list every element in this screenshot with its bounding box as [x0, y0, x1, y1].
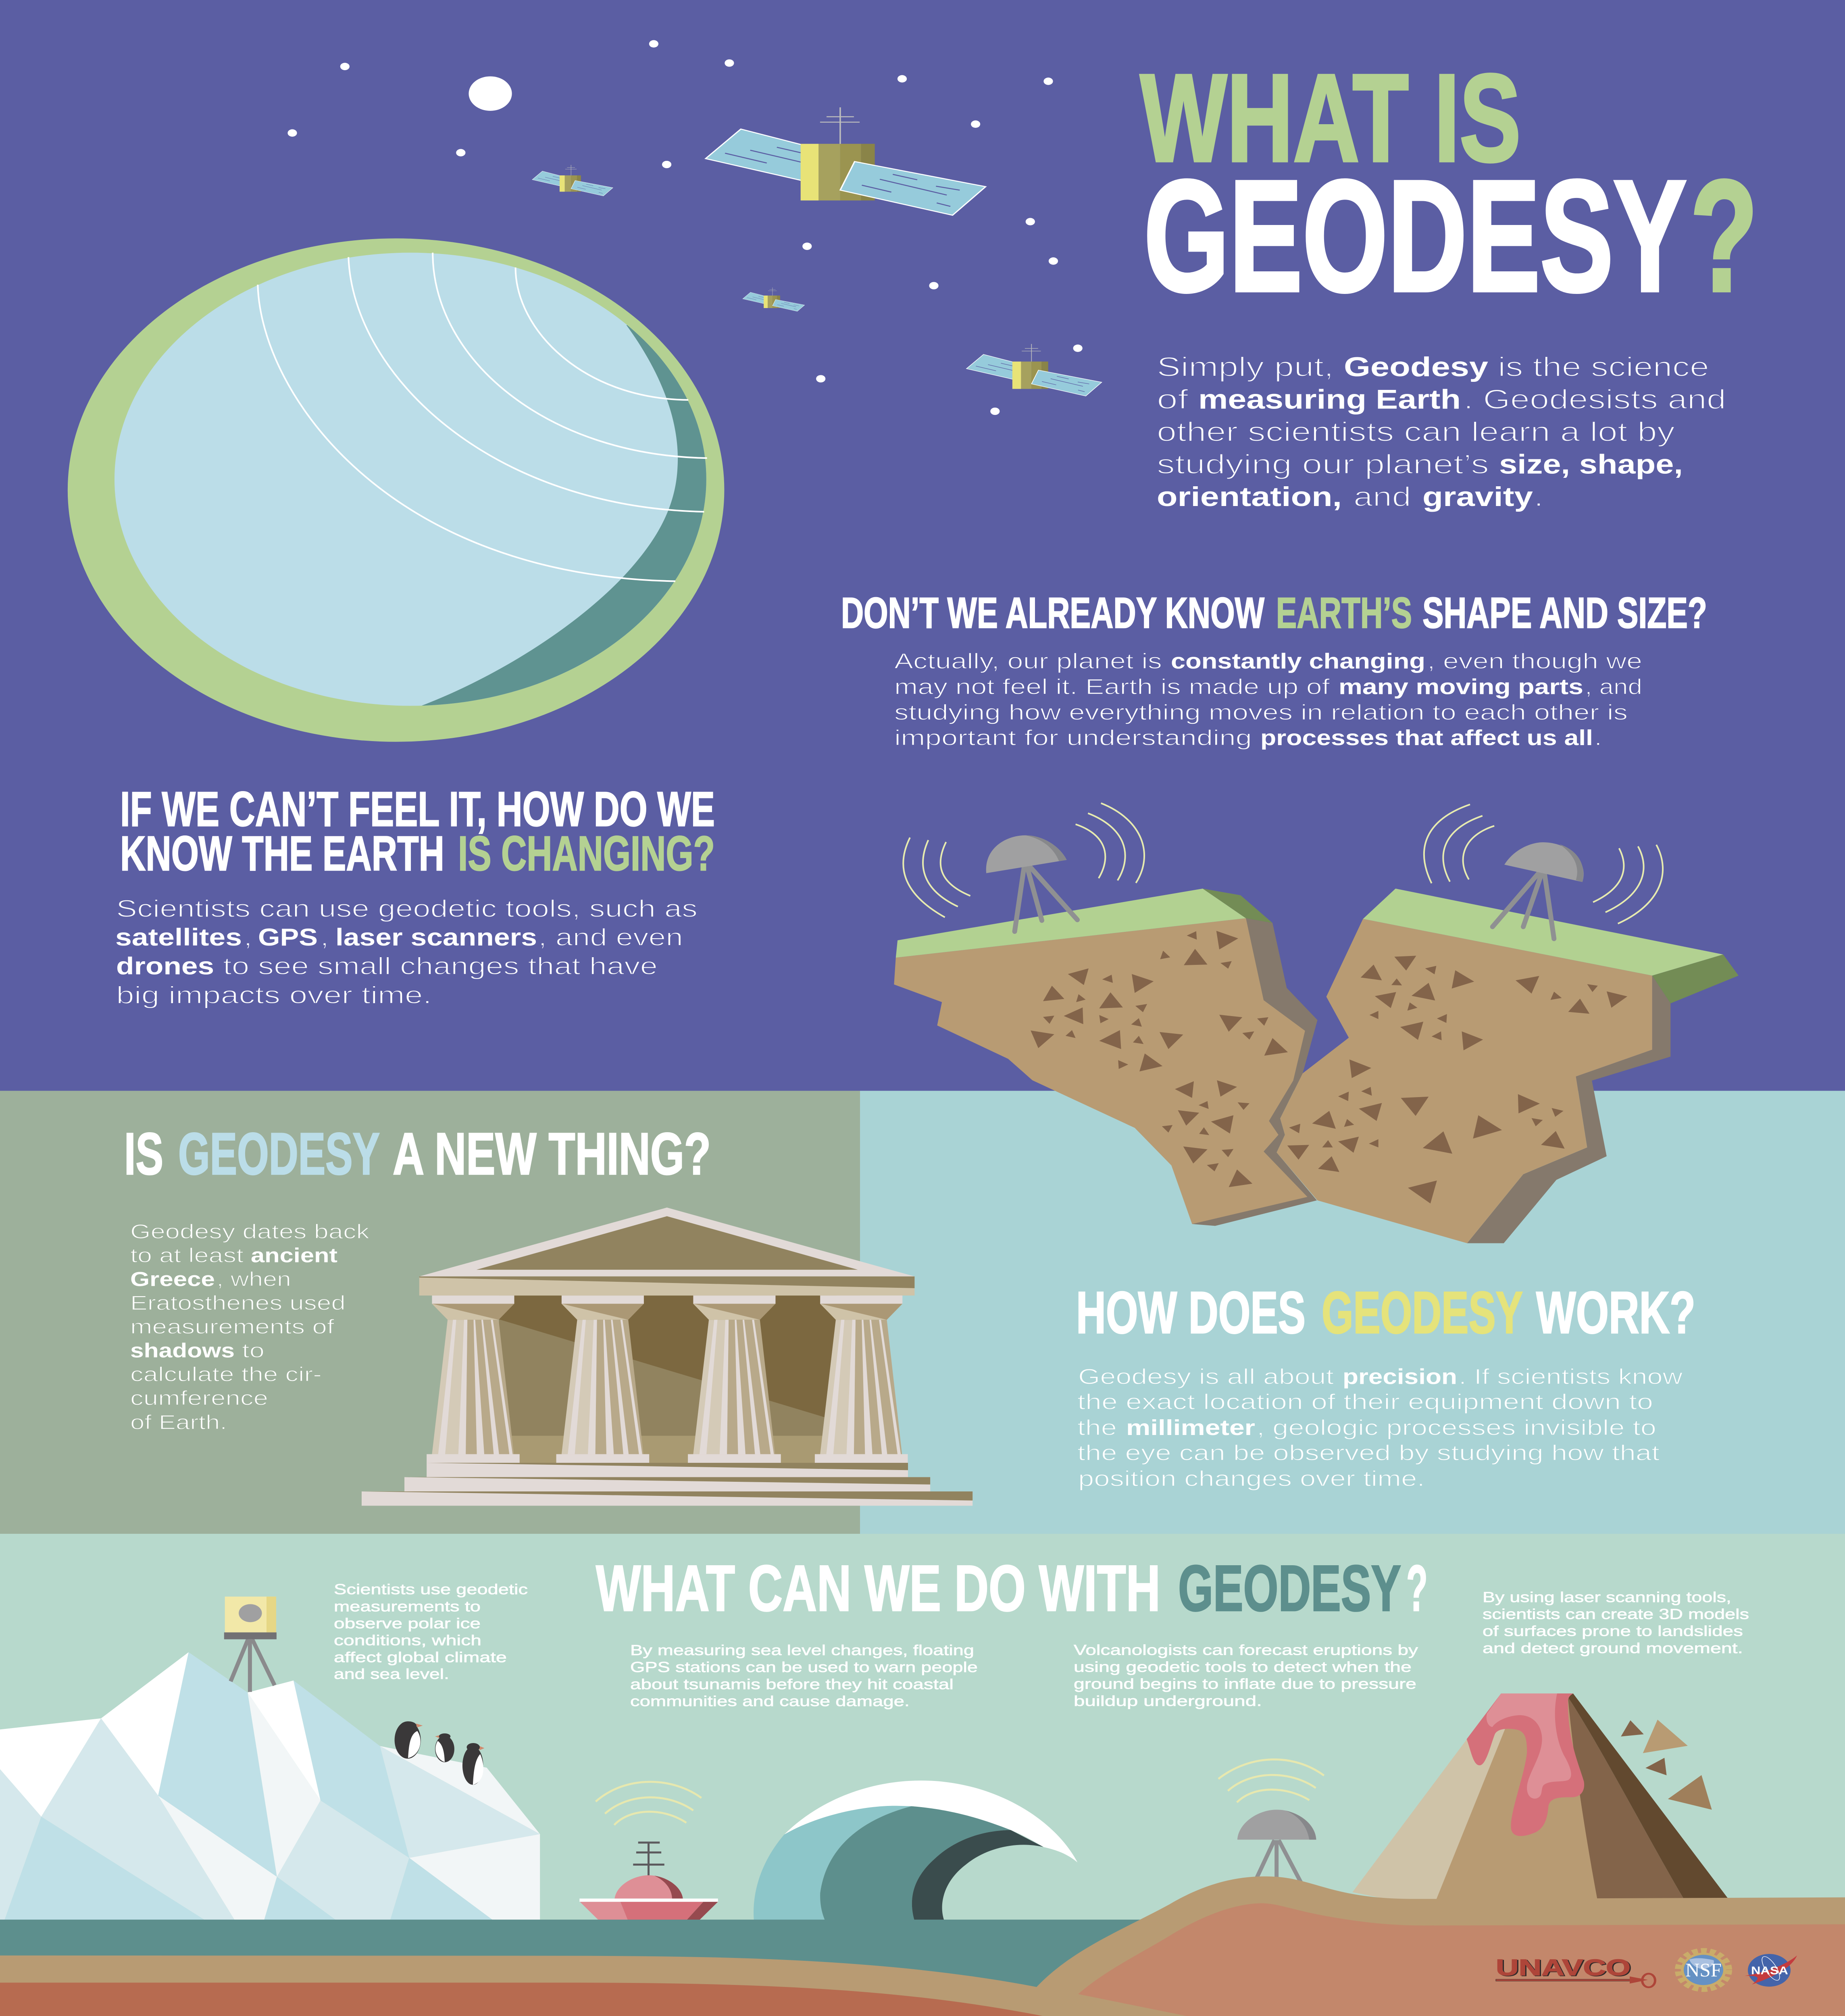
- temple column 4: [815, 1295, 908, 1463]
- text: ?: [1406, 1552, 1428, 1624]
- text block: shape and size: constantly changing: [1171, 650, 1425, 673]
- text block: precision: [1077, 1365, 1683, 1491]
- temple column 2: [556, 1295, 649, 1463]
- text block: geodetic tools: drones: [116, 952, 214, 979]
- flying rocks: [1621, 1720, 1712, 1810]
- text block: polar ice: conditions, which: [334, 1632, 481, 1648]
- text block: precision: millimeter: [1126, 1416, 1255, 1440]
- text block: history: , when: [217, 1268, 291, 1291]
- logo: NSF: [1678, 1951, 1728, 1989]
- text block: tsunami: GPS stations can be used to warn people: [630, 1659, 978, 1675]
- penguin 2: [435, 1733, 454, 1762]
- illustration: earth globe: [68, 238, 724, 742]
- heading: how does geodesy work: HOW DOES: [1076, 1280, 1306, 1346]
- heading: is geodesy new: [124, 1121, 711, 1187]
- temple column 1: [427, 1295, 520, 1463]
- logo: UNAVCO: UNAVCO: [1496, 1954, 1631, 1980]
- logo: UNAVCO: UNAVCO: [1497, 1955, 1632, 1981]
- text block: precision: Geodesy is all about: [1078, 1365, 1334, 1389]
- text block: geodetic tools: to see small changes that have: [223, 952, 658, 979]
- text block: shape and size: studying how everything moves in relation to each other is: [894, 701, 1628, 725]
- text block: history: of Earth.: [130, 1411, 227, 1433]
- text block: shape and size: [894, 650, 1642, 750]
- text block: precision: position changes over time.: [1078, 1467, 1425, 1491]
- text block: volcano: [1074, 1642, 1418, 1709]
- text block: tsunami: communities and cause damage.: [630, 1693, 910, 1709]
- panel: purple header background: [0, 0, 1845, 1091]
- text block: polar ice: observe polar ice: [334, 1615, 481, 1631]
- iceberg: [0, 1652, 540, 1920]
- text block: volcano: ground begins to inflate due to pressure: [1074, 1676, 1416, 1692]
- logo: NASA: NASA: [1751, 1964, 1788, 1977]
- text block: history: cumference: [130, 1387, 268, 1410]
- icon: small satellite centre: [743, 287, 805, 311]
- tsunami wave: [754, 1781, 1077, 1920]
- text block: tsunami: [630, 1642, 978, 1709]
- heading: how does geodesy work: [1076, 1280, 1695, 1346]
- icon: small satellite top left: [532, 165, 613, 196]
- text block: volcano: Volcanologists can forecast eruptions by: [1074, 1642, 1418, 1658]
- logo: NASA: [1745, 1954, 1797, 1987]
- logo: UNAVCO: [1496, 1954, 1655, 1987]
- text block: geodetic tools: satellites: [115, 923, 242, 951]
- pediment: [419, 1208, 914, 1295]
- text block: history: [130, 1221, 370, 1433]
- sea water band: [0, 1920, 1845, 2016]
- temple steps: [362, 1463, 972, 1506]
- right block: [1277, 889, 1739, 1243]
- text block: shape and size: processes that affect us all: [1260, 726, 1593, 750]
- ground: dark mantle layer: [0, 1983, 1043, 2016]
- text block: tsunami: about tsunamis before they hit coastal: [630, 1676, 954, 1692]
- illustration: cracked earth block with GPS stations: [894, 803, 1739, 1243]
- heading: is geodesy new: IS: [124, 1121, 163, 1187]
- text block: precision: precision: [1343, 1365, 1457, 1389]
- text block: intro: Simply put,: [1157, 352, 1334, 382]
- text block: shape and size: may not feel it. Earth is made up of: [894, 675, 1330, 699]
- icon: laser scanner on tripod: [224, 1597, 277, 1692]
- text block: shape and size: , and: [1585, 675, 1642, 699]
- illustration: greek temple: [362, 1208, 972, 1506]
- text block: intro: [1157, 352, 1726, 512]
- text block: history: shadows: [130, 1340, 235, 1362]
- text block: precision: the exact location of their equipment down to: [1077, 1390, 1653, 1414]
- illustration: iceberg with scanner and penguins: [0, 1597, 540, 1920]
- text block: history: Eratosthenes used: [130, 1292, 346, 1314]
- text block: geodetic tools: Scientists can use geodetic tools, such as: [116, 895, 698, 922]
- text block: shape and size: important for understanding: [894, 726, 1252, 750]
- temple column 3: [688, 1295, 781, 1463]
- illustration: GPS buoy boat and tsunami wave: [579, 1781, 1077, 1920]
- text block: polar ice: measurements to: [334, 1598, 481, 1614]
- heading: how does geodesy work: WORK?: [1536, 1280, 1695, 1346]
- text block: intro: measuring Earth: [1198, 384, 1461, 414]
- heading: shape and size: EARTH’S: [1276, 588, 1412, 637]
- heading: how does geodesy work: GEODESY: [1322, 1280, 1523, 1346]
- text block: history: Geodesy dates back: [130, 1221, 370, 1243]
- text block: geodetic tools: [115, 895, 698, 1008]
- text block: geodetic tools: , and even: [538, 923, 683, 951]
- text block: intro: Geodesy: [1344, 352, 1488, 382]
- heading: can't feel it: IS CHANGING?: [458, 826, 715, 881]
- text block: volcano: buildup underground.: [1074, 1693, 1262, 1709]
- text block: landslides: scientists can create 3D models: [1483, 1606, 1749, 1622]
- icon: right GPS station with signal arcs: [1424, 804, 1663, 939]
- ground: tan crust layer: [0, 1876, 1845, 2016]
- heading: shape and size: DON’T WE ALREADY KNOW: [841, 588, 1264, 637]
- text block: shape and size: many moving parts: [1339, 675, 1583, 699]
- penguin 1: [395, 1721, 423, 1759]
- ground: salmon mantle layer: [1078, 1903, 1845, 2016]
- text block: history: calculate the cir-: [130, 1364, 322, 1386]
- stars: [287, 40, 1083, 415]
- text block: history: to: [242, 1340, 264, 1362]
- text block: intro: orientation,: [1157, 481, 1342, 512]
- heading: what can we do: WHAT CAN WE DO WITH: [596, 1552, 1160, 1624]
- text block: history: to at least: [130, 1245, 244, 1267]
- text block: precision: , geologic processes invisible to: [1257, 1416, 1656, 1440]
- text block: tsunami: By measuring sea level changes, floating: [630, 1642, 974, 1658]
- text block: shape and size: .: [1594, 726, 1602, 750]
- heading: what can we do: GEODESY: [1178, 1552, 1401, 1624]
- panel: mint applications background: [0, 1534, 1845, 2016]
- text block: history: Greece: [130, 1268, 215, 1291]
- penguin 3: [462, 1743, 484, 1785]
- illustration: volcano and GPS station: [1218, 1693, 1732, 1903]
- text block: landslides: By using laser scanning tools,: [1483, 1589, 1731, 1605]
- text block: geodetic tools: GPS: [258, 923, 318, 951]
- title: ?: [1690, 147, 1758, 324]
- text block: precision: the: [1077, 1416, 1117, 1440]
- text block: precision: . If scientists know: [1459, 1365, 1683, 1389]
- text block: history: ancient: [251, 1245, 337, 1267]
- moon: [469, 76, 512, 111]
- panel: teal how it works background: [860, 1091, 1845, 1534]
- icon: medium satellite right: [966, 344, 1102, 396]
- text block: intro: size, shape,: [1499, 449, 1683, 479]
- text block: polar ice: [334, 1581, 528, 1682]
- text block: landslides: and detect ground movement.: [1483, 1640, 1743, 1656]
- heading: is geodesy new: GEODESY: [178, 1121, 380, 1187]
- text block: intro: is the science: [1498, 352, 1709, 382]
- text block: precision: the eye can be observed by studying how that: [1077, 1441, 1660, 1465]
- text block: landslides: of surfaces prone to landslides: [1483, 1623, 1743, 1639]
- text block: history: measurements of: [130, 1316, 335, 1338]
- text block: intro: and: [1354, 481, 1411, 512]
- heading: can't feel it: IF WE CAN’T FEEL IT, HOW DO WE: [120, 782, 715, 837]
- heading: is geodesy new: A NEW THING?: [393, 1121, 711, 1187]
- text block: intro: .: [1534, 481, 1543, 512]
- text block: intro: of: [1157, 384, 1188, 414]
- text block: shape and size: Actually, our planet is: [894, 650, 1162, 673]
- text block: volcano: using geodetic tools to detect when the: [1074, 1659, 1412, 1675]
- title: [1140, 49, 1758, 324]
- logo: NSF: NSF: [1685, 1960, 1722, 1981]
- icon: GPS station near volcano: [1218, 1760, 1324, 1885]
- text block: polar ice: affect global climate: [334, 1649, 507, 1665]
- text block: polar ice: and sea level.: [334, 1666, 449, 1682]
- icon: floating GPS buoy: [579, 1782, 718, 1920]
- text block: geodetic tools: ,: [244, 923, 252, 951]
- text block: landslides: [1483, 1589, 1749, 1656]
- text block: geodetic tools: ,: [320, 923, 329, 951]
- icon: large satellite: [706, 107, 986, 215]
- heading: can't feel it: [120, 782, 715, 881]
- text block: intro: . Geodesists and: [1464, 384, 1726, 414]
- icon: left GPS station with signal arcs: [903, 803, 1144, 931]
- left block: [894, 889, 1318, 1226]
- text block: intro: gravity: [1422, 481, 1533, 512]
- text block: intro: other scientists can learn a lot by: [1157, 417, 1675, 447]
- text block: polar ice: Scientists use geodetic: [334, 1581, 528, 1597]
- title: WHAT IS: [1140, 49, 1521, 187]
- text block: geodetic tools: big impacts over time.: [116, 981, 432, 1008]
- text block: shape and size: , even though we: [1427, 650, 1642, 673]
- text block: intro: studying our planet’s: [1157, 449, 1489, 479]
- heading: can't feel it: KNOW THE EARTH: [120, 826, 444, 881]
- volcano: [1352, 1693, 1732, 1903]
- illustration: space scene: [68, 40, 1102, 742]
- text block: geodetic tools: laser scanners: [335, 923, 537, 951]
- panel: green history background: [0, 1091, 860, 1534]
